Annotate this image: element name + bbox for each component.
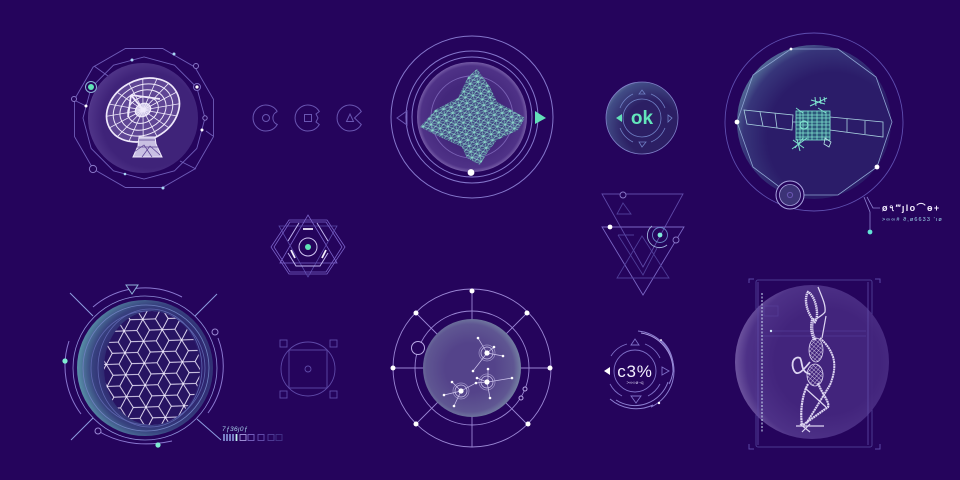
panel: triangles bbox=[602, 192, 684, 295]
star links bbox=[444, 338, 512, 406]
scale dotted line bbox=[761, 293, 763, 433]
sphere rings bbox=[73, 296, 217, 440]
panel: radio telescope bbox=[72, 48, 214, 190]
gauge value: c3% bbox=[617, 362, 653, 381]
panel: mountain radar bbox=[391, 36, 553, 198]
outer nodes bbox=[390, 288, 552, 426]
radar disc bbox=[417, 62, 527, 172]
satellite nodes bbox=[735, 48, 879, 169]
specimen disc bbox=[735, 285, 889, 439]
icon: dish wireframe bbox=[95, 66, 191, 157]
panel: wireframe sphere bbox=[62, 285, 282, 448]
dish outer frame bbox=[74, 48, 214, 188]
dish background disc bbox=[88, 63, 198, 173]
gauge small dots bbox=[658, 339, 662, 404]
radar rings bbox=[391, 36, 553, 198]
sphere rhombus grid bbox=[104, 311, 200, 425]
arrow: ok left bbox=[616, 114, 622, 122]
panel: percentage gauge bbox=[604, 331, 674, 409]
panel: biological strand bbox=[735, 279, 889, 449]
radar white dot bbox=[468, 169, 474, 176]
inner triangles bbox=[617, 203, 669, 278]
progress bars bbox=[224, 434, 282, 441]
specimen frame bbox=[749, 279, 880, 449]
satellite polygon bbox=[737, 49, 892, 195]
constellation disc bbox=[423, 319, 521, 417]
callout subtitle: >∞∞# ϑ,ø6633 'ıø bbox=[882, 217, 943, 223]
ok rings bbox=[620, 90, 672, 147]
sphere markers bbox=[62, 285, 218, 448]
arrow: left outline bbox=[397, 111, 407, 125]
arrow: right solid bbox=[535, 111, 546, 124]
constellation rings and spokes bbox=[393, 289, 551, 447]
HUD infographic canvas bbox=[62, 32, 942, 450]
stars bbox=[443, 337, 513, 407]
gauge rings bbox=[610, 339, 669, 403]
panel: ok control bbox=[606, 82, 678, 154]
arrow: gauge left bbox=[604, 367, 610, 375]
icon: target square bbox=[280, 340, 337, 398]
ok disc bbox=[606, 82, 678, 154]
triangle nodes bbox=[608, 192, 679, 243]
callout lines bbox=[864, 197, 880, 232]
gauge outer arcs bbox=[610, 331, 674, 409]
panel: hexagon emblem bbox=[271, 215, 345, 277]
icon: satellite wireframe bbox=[744, 97, 883, 151]
sphere disc bbox=[77, 300, 213, 436]
strand bbox=[793, 287, 834, 432]
satellite outer ring bbox=[725, 33, 903, 211]
ring markers bbox=[412, 342, 527, 400]
gauge caption: >∞∞ø¬q bbox=[627, 380, 644, 385]
satellite disc bbox=[737, 45, 891, 199]
lower triangle bbox=[602, 227, 684, 295]
panel: constellation bbox=[390, 288, 552, 447]
triangle node core bbox=[658, 233, 662, 237]
triangle node ring bbox=[647, 226, 667, 248]
hexagon core bbox=[305, 244, 311, 250]
frame nodes bbox=[72, 52, 207, 190]
upper triangle bbox=[602, 194, 683, 267]
frame inner rails bbox=[758, 282, 868, 445]
icon: notched circle with dot bbox=[253, 105, 277, 131]
hexagon ring bbox=[299, 238, 317, 256]
icon: notched circle with square bbox=[295, 105, 319, 131]
callout title: ø৭‴ȷlo⌒ɵ+ bbox=[882, 202, 941, 213]
hexagon inner brackets bbox=[288, 223, 328, 266]
icon row: three notched circles bbox=[253, 105, 361, 131]
satellite lens bbox=[776, 181, 804, 209]
ok label: ok bbox=[631, 108, 654, 129]
sphere outer arcs bbox=[65, 288, 223, 444]
icon: notched circle with triangle bbox=[337, 105, 361, 131]
scale marker bbox=[770, 330, 772, 332]
hexagon bars bbox=[291, 229, 326, 258]
wireframe mountain bbox=[420, 69, 525, 165]
hexagon outlines bbox=[271, 215, 345, 277]
panel: satellite bbox=[725, 33, 943, 234]
progress label: 7ƒ36ȷ0ƒ bbox=[222, 426, 248, 433]
callout dot bbox=[868, 230, 872, 234]
